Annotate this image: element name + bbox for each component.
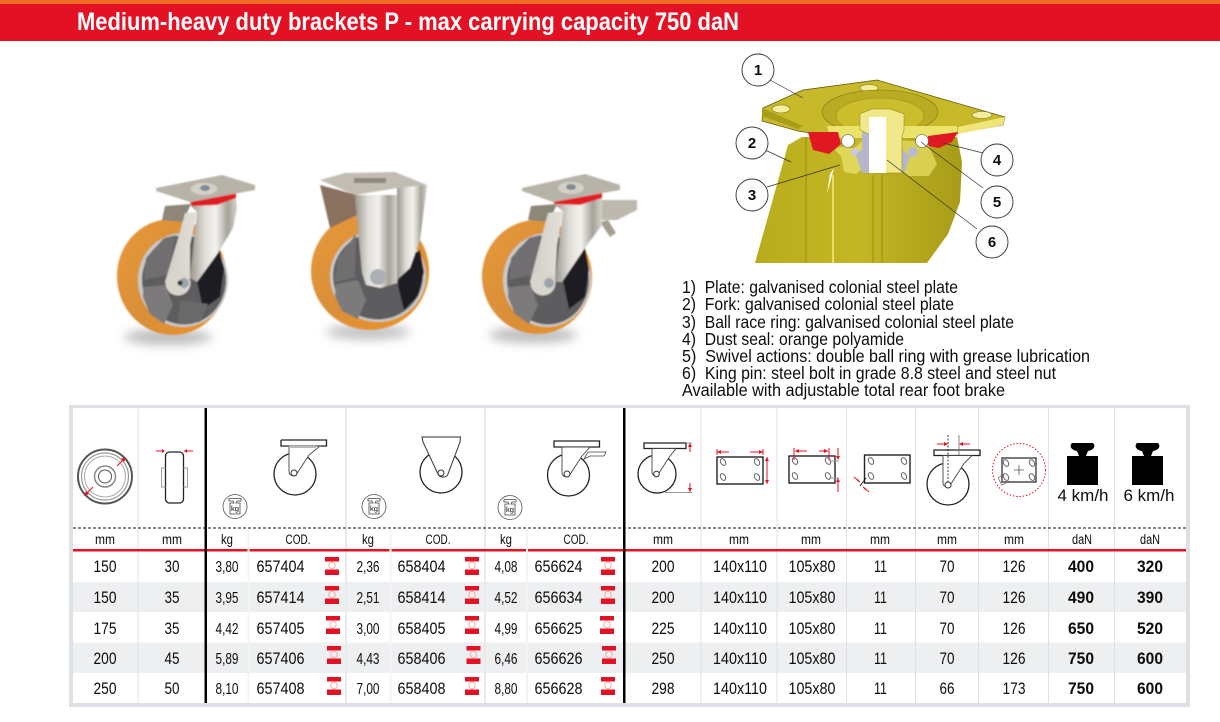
icon: offset [927, 435, 980, 505]
row 5: 173 [1002, 679, 1026, 698]
callout 4: 4 [993, 152, 1002, 169]
row 2: 490 [1068, 588, 1094, 607]
row 2: 150 [94, 588, 116, 607]
row 4: 6,46 [494, 651, 518, 668]
icon: weight badge fixed [362, 494, 386, 518]
row 1: 320 [1137, 557, 1163, 576]
row 4: 600 [1137, 649, 1163, 668]
title: Medium-heavy duty brackets P - max carrying capacity 750 daN [77, 8, 739, 36]
row 4: 658406 [398, 649, 446, 668]
row 2: 105x80 [788, 588, 836, 607]
row 3: 70 [940, 619, 954, 638]
icon: weight badge braked [498, 496, 522, 520]
row 5: 600 [1137, 679, 1163, 698]
dust seal red [808, 132, 841, 154]
row 5: 656628 [534, 679, 582, 698]
icon: weight 6 km/h [1124, 443, 1174, 505]
row 1: 2,36 [356, 559, 380, 576]
row 4: 45 [164, 649, 180, 668]
row 2: 657414 [256, 588, 304, 607]
photo: swivel castor [109, 175, 255, 345]
icon: weight 6 km/h: 6 km/h [1124, 486, 1174, 505]
row 2: 200 [652, 588, 674, 607]
parts list: 6) King pin: steel bolt in grade 8.8 steel and steel nut [682, 363, 1056, 383]
icon: hole spacing [789, 448, 840, 492]
row 4: 657406 [256, 649, 304, 668]
row 4: 11 [874, 649, 887, 668]
header bar [0, 0, 1220, 41]
row 3: 126 [1002, 619, 1026, 638]
icon: braked castor [548, 441, 606, 496]
row 4 [94, 646, 1163, 668]
row 3: 4,42 [216, 621, 238, 638]
icon: weight badge swivel [223, 494, 247, 518]
parts list: 5) Swivel actions: double ball ring with grease lubrication [682, 346, 1090, 366]
row 2: 126 [1002, 588, 1026, 607]
row 1: 656624 [534, 557, 582, 576]
parts list: 1) Plate: galvanised colonial steel plate [682, 277, 958, 297]
callout 2: 2 [748, 135, 756, 152]
photo: swivel castor with brake [475, 174, 637, 343]
row 3: 175 [94, 619, 116, 638]
parts list: 4) Dust seal: orange polyamide [682, 329, 904, 349]
parts list: 2) Fork: galvanised colonial steel plate [682, 294, 954, 314]
icon: fixed castor [420, 437, 462, 493]
icon: wheel front view [78, 450, 132, 504]
row 1: 400 [1068, 557, 1094, 576]
icon: plate size [717, 449, 769, 484]
row 1: 657404 [256, 557, 304, 576]
row 3: 656625 [534, 619, 582, 638]
photo: fixed castor [311, 172, 429, 340]
row 2: 140x110 [713, 588, 767, 607]
icon: weight badge swivel: kg [231, 504, 239, 513]
cutaway diagram [736, 54, 1013, 263]
row 1: 200 [652, 557, 674, 576]
row 5: 7,00 [356, 681, 380, 698]
units row: kg [500, 532, 512, 547]
units row: daN [1072, 532, 1092, 547]
callout 1 [742, 54, 803, 98]
row 2: 11 [874, 588, 887, 607]
row 1: 150 [94, 557, 116, 576]
row 4: 105x80 [788, 649, 836, 668]
row 1: 105x80 [788, 557, 836, 576]
row 1: 11 [874, 557, 887, 576]
units row: mm [653, 532, 673, 547]
row 3: 4,99 [494, 621, 518, 638]
units row: mm [95, 532, 115, 547]
row 2: 390 [1137, 588, 1163, 607]
row 3: 650 [1068, 619, 1094, 638]
callout 4 [943, 143, 1013, 176]
row 3: 140x110 [713, 619, 767, 638]
icon: weight badge braked: kg [506, 505, 514, 514]
units row: mm [162, 532, 182, 547]
row 4: 5,89 [216, 651, 238, 668]
row 2: 70 [940, 588, 954, 607]
row 2: 4,52 [494, 590, 518, 607]
row 1: 4,08 [494, 559, 518, 576]
row 2 [94, 586, 1163, 607]
row 5: 250 [94, 679, 116, 698]
plate [762, 80, 1005, 137]
icon: weight badge fixed: kg [370, 504, 378, 513]
row 5: 11 [874, 679, 887, 698]
row 5: 8,80 [494, 681, 518, 698]
units row [95, 532, 1160, 547]
callout 3: 3 [748, 187, 756, 204]
units row: daN [1140, 532, 1160, 547]
icon: swivel castor [274, 440, 326, 495]
row 5: 50 [164, 679, 180, 698]
row 3: 520 [1137, 619, 1163, 638]
icon: overall height [638, 443, 692, 493]
row 2: 3,95 [216, 590, 238, 607]
specification table [69, 405, 1190, 707]
units row: mm [1004, 532, 1024, 547]
row 3: 658405 [398, 619, 446, 638]
row 5: 657408 [256, 679, 304, 698]
row 5: 750 [1068, 679, 1094, 698]
row 1: 658404 [398, 557, 446, 576]
row 3 [94, 616, 1163, 638]
row 2: 2,51 [356, 590, 380, 607]
units row: kg [221, 532, 233, 547]
row 3: 11 [874, 619, 887, 638]
row 4: 750 [1068, 649, 1094, 668]
row 2: 658414 [398, 588, 446, 607]
row 1: 3,80 [216, 559, 239, 576]
row 4: 250 [652, 649, 674, 668]
row 5 [94, 677, 1163, 698]
king pin [856, 110, 910, 173]
row 4: 126 [1002, 649, 1026, 668]
icon: swivel radius [992, 444, 1046, 496]
units row: COD. [426, 532, 450, 547]
row 3: 35 [164, 619, 180, 638]
row 5: 658408 [398, 679, 446, 698]
row 3: 105x80 [788, 619, 836, 638]
row 3: 657405 [256, 619, 304, 638]
units row: mm [801, 532, 821, 547]
units row: mm [729, 532, 749, 547]
icon: weight 4 km/h [1058, 443, 1108, 505]
row 5: 105x80 [788, 679, 836, 698]
icon: wheel side view [156, 449, 193, 503]
callout 6 [887, 160, 1008, 258]
callout 3 [736, 165, 840, 211]
row 1: 140x110 [713, 557, 767, 576]
row 4: 656626 [534, 649, 582, 668]
row 2: 656634 [534, 588, 582, 607]
row 4: 4,43 [356, 651, 380, 668]
units row: kg [362, 532, 374, 547]
row 5: 140x110 [713, 679, 767, 698]
parts list: Available with adjustable total rear foot brake [682, 380, 1005, 400]
row 5: 66 [940, 679, 954, 698]
units row: mm [937, 532, 957, 547]
fork [755, 137, 962, 263]
row 4: 140x110 [713, 649, 767, 668]
row 3: 3,00 [356, 621, 380, 638]
row 3: 225 [652, 619, 674, 638]
callout 5 [921, 142, 1013, 218]
row 5: 298 [652, 679, 674, 698]
row 4: 70 [940, 649, 954, 668]
row 5: 8,10 [216, 681, 239, 698]
callout 1: 1 [754, 62, 762, 79]
parts list [682, 277, 1090, 400]
row 2: 35 [164, 588, 180, 607]
parts list: 3) Ball race ring: galvanised colonial steel plate [682, 312, 1014, 332]
callout 2 [736, 127, 791, 162]
row 1 [94, 557, 1163, 576]
row 1: 70 [940, 557, 954, 576]
ball race [835, 139, 874, 174]
callout 5: 5 [993, 194, 1001, 211]
units row: COD. [564, 532, 588, 547]
row 1: 30 [164, 557, 180, 576]
row 4: 200 [94, 649, 116, 668]
icon: weight 4 km/h: 4 km/h [1058, 486, 1108, 505]
row 1: 126 [1002, 557, 1026, 576]
icon: hole diameter [854, 455, 910, 492]
units row: mm [870, 532, 890, 547]
units row: COD. [286, 532, 310, 547]
callout 6: 6 [988, 234, 996, 251]
